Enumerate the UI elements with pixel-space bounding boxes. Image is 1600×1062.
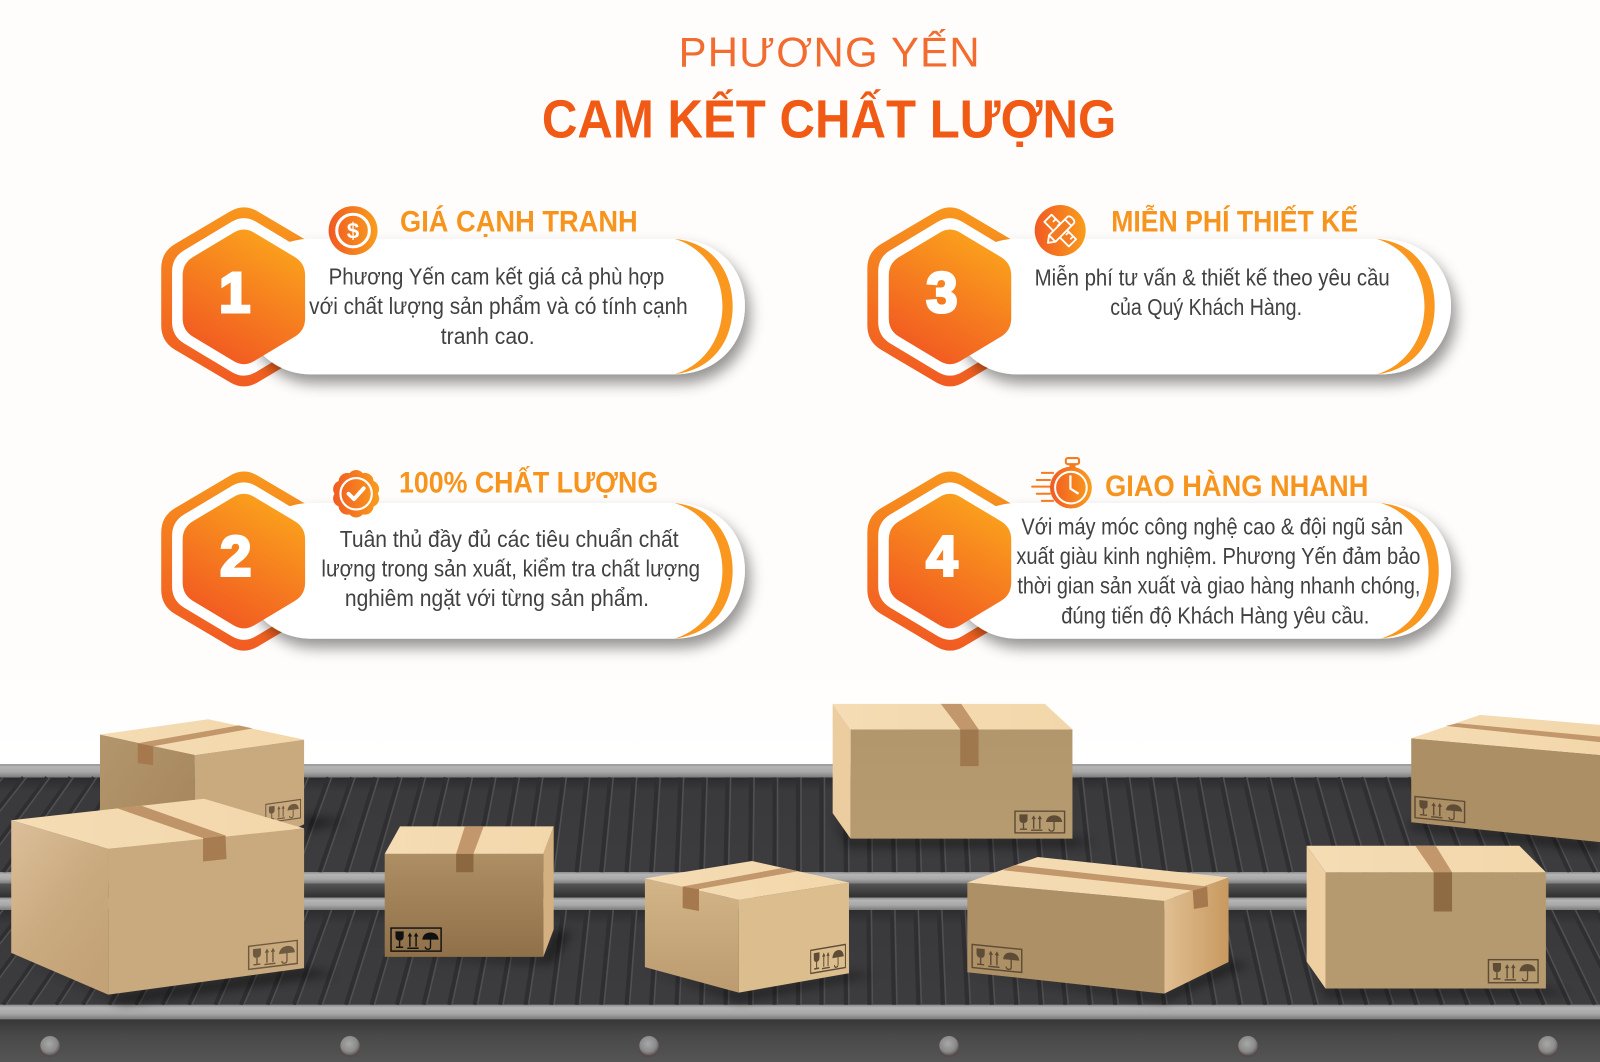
body text: đúng tiến độ Khách Hàng yêu cầu. xyxy=(1061,602,1369,628)
icon: quality badge xyxy=(333,470,379,517)
pill panel xyxy=(949,239,1451,374)
body text: Miễn phí tư vấn & thiết kế theo yêu cầu xyxy=(1035,265,1390,291)
body text: lượng trong sản xuất, kiểm tra chất lượng xyxy=(321,555,700,581)
conveyor belt xyxy=(0,653,1600,1062)
body text: Tuân thủ đầy đủ các tiêu chuẩn chất xyxy=(340,526,679,552)
title: CAM KẾT CHẤT LƯỢNG xyxy=(542,90,1116,150)
orange arc xyxy=(674,503,733,639)
box: center wide xyxy=(967,857,1229,994)
icon: ruler and pencil xyxy=(1035,205,1086,256)
heading: MIỄN PHÍ THIẾT KẾ xyxy=(1111,205,1358,239)
card 4: fast delivery xyxy=(867,458,1451,651)
hexagon with number 4 xyxy=(889,494,1011,628)
heading: GIÁ CẠNH TRANH xyxy=(400,205,638,239)
hexagon with number 2 xyxy=(183,494,305,628)
heading: GIAO HÀNG NHANH xyxy=(1105,469,1368,503)
orange arc xyxy=(674,239,733,374)
body text: nghiêm ngặt với từng sản phẩm. xyxy=(345,585,649,611)
orange arc xyxy=(1381,503,1439,639)
box: top right cropped xyxy=(1411,715,1600,842)
body text: tranh cao. xyxy=(441,323,535,349)
body text: của Quý Khách Hàng. xyxy=(1110,294,1302,320)
hexagon ring xyxy=(867,207,1033,386)
box: right large xyxy=(1307,846,1546,989)
hexagon with number 3: 3 xyxy=(926,261,957,324)
card 1: competitive price xyxy=(161,205,745,386)
hexagon with number 4: 4 xyxy=(926,524,957,587)
pill panel xyxy=(949,503,1451,639)
hexagon ring xyxy=(161,207,327,386)
hexagon ring xyxy=(867,472,1033,651)
card 3: free design xyxy=(867,205,1451,386)
body text xyxy=(1035,265,1390,320)
hexagon with number 1: 1 xyxy=(219,261,250,324)
rivets xyxy=(39,1036,1559,1057)
body text xyxy=(321,526,700,611)
box: center small xyxy=(645,861,849,993)
hexagon with number 1 xyxy=(183,230,305,364)
hexagon with number 3 xyxy=(889,230,1011,364)
orange arc xyxy=(1377,239,1435,374)
body text xyxy=(1016,514,1420,628)
icon: stopwatch xyxy=(1032,458,1092,509)
box shadows on belt xyxy=(11,813,1600,1005)
hexagon ring xyxy=(161,472,327,651)
card 2: 100% quality xyxy=(161,466,745,651)
body text xyxy=(309,264,688,349)
heading: 100% CHẤT LƯỢNG xyxy=(399,466,658,500)
pill panel xyxy=(243,239,745,374)
icon: dollar coin: $ xyxy=(347,219,360,244)
pill panel xyxy=(243,503,745,639)
box: top center xyxy=(833,704,1072,839)
body text: xuất giàu kinh nghiệm. Phương Yến đảm bảo xyxy=(1016,543,1420,569)
body text: với chất lượng sản phẩm và có tính cạnh xyxy=(309,293,688,319)
icon: dollar coin xyxy=(329,206,378,255)
title xyxy=(542,28,1116,150)
body text: Với máy móc công nghệ cao & đội ngũ sản xyxy=(1021,514,1403,540)
box: small center-left with black label xyxy=(385,826,554,957)
body text: Phương Yến cam kết giá cả phù hợp xyxy=(329,264,664,290)
hexagon with number 2: 2 xyxy=(220,524,251,587)
box: front large left xyxy=(11,799,304,995)
body text: thời gian sản xuất và giao hàng nhanh chóng, xyxy=(1017,573,1420,599)
title: PHƯƠNG YẾN xyxy=(679,28,980,75)
box: back left xyxy=(100,719,304,877)
